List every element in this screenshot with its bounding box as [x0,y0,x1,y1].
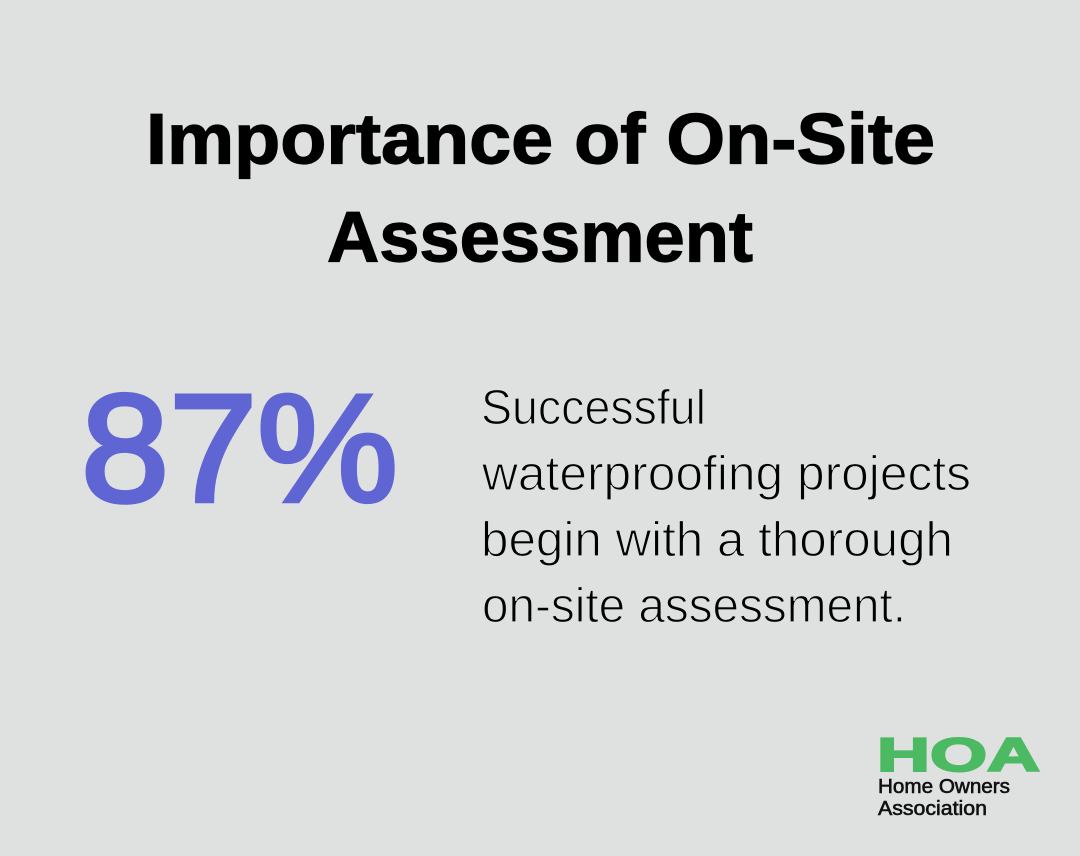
logo text: Home Owners Association [878,776,1010,820]
statistic: 87%: 87% [81,363,398,534]
logo mark: HOA: HOA [877,728,1040,781]
title [146,100,935,278]
title: Assessment [327,198,753,278]
description text: waterproofing projects [481,447,971,501]
description text: begin with a thorough [481,513,953,567]
logo: HOA Home Owners Association [877,728,1040,820]
title: Importance of On-Site [146,100,935,180]
description text: on-site assessment. [482,579,906,633]
logo text: Home Owners Association: Association [878,798,987,820]
description text: Successful [481,381,706,435]
logo text: Home Owners Association: Home Owners [878,776,1010,798]
description text [481,381,971,633]
